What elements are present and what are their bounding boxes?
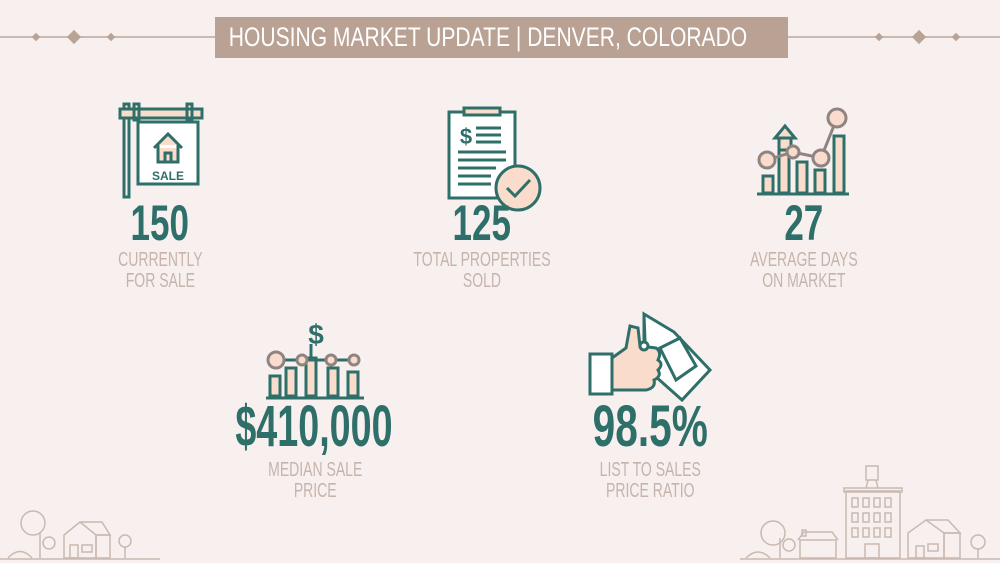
decoration: left houses [0, 510, 160, 560]
stat: 98.5%: 98.5% [592, 394, 708, 459]
label: average days on market: ON MARKET [762, 270, 846, 292]
label: total properties sold: TOTAL PROPERTIES [413, 249, 551, 271]
icon: for sale sign [118, 102, 204, 198]
stat: $410,000: $410,000 [235, 394, 393, 459]
stat: 150: 150 [131, 195, 189, 251]
header line with diamonds [0, 30, 1000, 44]
title [215, 17, 788, 58]
icon: price chart: $ [308, 319, 324, 350]
stat: 125: 125 [453, 195, 511, 251]
label: currently for sale [118, 249, 202, 292]
label: average days on market: AVERAGE DAYS [750, 249, 858, 271]
label: average days on market [750, 249, 858, 292]
icon: for sale sign: SALE [152, 169, 184, 183]
icon: bar chart with house [757, 108, 849, 196]
decoration: right houses and building [740, 465, 1000, 560]
icon: clipboard with check: $ [460, 124, 472, 149]
label: median sale price: PRICE [294, 480, 336, 502]
label: median sale price: MEDIAN SALE [268, 459, 362, 481]
label: total properties sold: SOLD [463, 270, 501, 292]
title: HOUSING MARKET UPDATE | DENVER, COLORADO [228, 22, 747, 52]
label: total properties sold [413, 249, 551, 292]
icon: thumbs up with tag [588, 311, 712, 402]
label: median sale price [268, 459, 362, 502]
label: currently for sale: CURRENTLY [118, 249, 202, 271]
stat: 27: 27 [785, 195, 823, 251]
label: list to sales price ratio: PRICE RATIO [606, 480, 694, 502]
icon: price chart [266, 319, 364, 400]
label: currently for sale: FOR SALE [125, 270, 195, 292]
label: list to sales price ratio: LIST TO SALES [599, 459, 701, 481]
label: list to sales price ratio [599, 459, 701, 502]
icon: clipboard with check [448, 106, 542, 212]
